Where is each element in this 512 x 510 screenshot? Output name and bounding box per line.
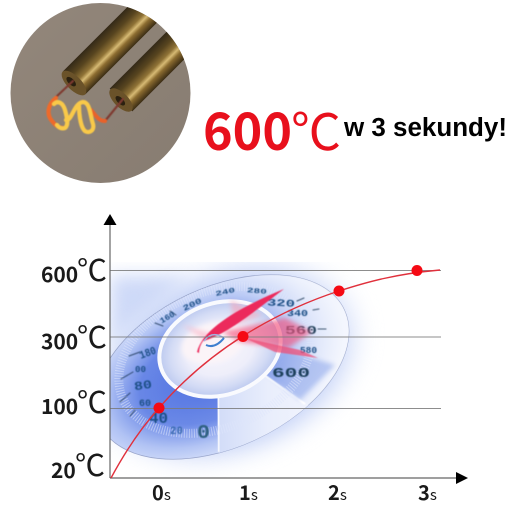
x axis labels: 1s <box>239 477 258 506</box>
horizontal grid lines <box>110 270 441 408</box>
gauge numerals: 180 <box>138 346 158 363</box>
y axis labels: 100 <box>41 391 78 421</box>
motion streaks <box>182 289 318 358</box>
x axis labels: 0s <box>152 477 171 506</box>
gauge numerals: 160 <box>159 310 177 326</box>
headline value: 600℃: 600 <box>203 90 292 165</box>
headline value: 600℃: ℃ <box>291 93 341 165</box>
light rim stripe band <box>114 284 313 438</box>
heating curve <box>111 270 440 478</box>
y axis labels: ℃ <box>77 246 107 290</box>
brass tube right <box>109 32 184 112</box>
gauge tick marks <box>120 298 326 416</box>
headline caption: w 3 sekundy! <box>343 114 507 142</box>
y axis labels: ℃ <box>77 313 107 357</box>
brass tube left <box>62 7 157 96</box>
y axis labels: ℃ <box>75 441 105 485</box>
gauge numerals <box>133 287 317 444</box>
gauge numerals: 60 <box>139 399 151 410</box>
y axis labels: ℃ <box>77 378 107 422</box>
gauge numerals: 280 <box>247 287 267 297</box>
y axis with arrow <box>104 214 116 478</box>
photo: heated wire between two brass tubes <box>10 3 190 183</box>
inner dial <box>157 299 282 399</box>
gauge numerals: 40 <box>149 410 168 428</box>
x axis labels <box>152 477 437 506</box>
gauge numerals: 20 <box>170 426 183 438</box>
headline value: 600℃ <box>203 90 341 165</box>
chart: temperature over time <box>41 208 468 510</box>
gauge face <box>110 274 350 460</box>
gauge numerals: 560 <box>285 324 317 338</box>
y axis labels: 300 <box>41 326 78 356</box>
gauge numerals: 320 <box>267 298 295 311</box>
headline <box>203 90 507 165</box>
data points <box>154 265 422 414</box>
gauge numerals: 00 <box>135 365 146 375</box>
gauge numerals: 200 <box>182 297 204 314</box>
y axis labels <box>41 246 107 485</box>
y axis labels: 600 <box>41 259 78 289</box>
y axis labels: 20 <box>51 455 76 485</box>
x axis with arrow <box>110 472 468 484</box>
x axis labels: 3s <box>418 477 437 506</box>
gauge numerals: 600 <box>272 366 310 382</box>
gauge numerals: 240 <box>215 287 236 299</box>
speedometer image <box>110 262 364 470</box>
gauge numerals: 80 <box>133 378 153 394</box>
gauge numerals: 580 <box>300 346 317 356</box>
gauge numerals: 340 <box>287 309 308 319</box>
glowing coil <box>49 81 123 132</box>
gauge numerals: 0 <box>197 422 210 444</box>
x axis labels: 2s <box>328 477 347 506</box>
